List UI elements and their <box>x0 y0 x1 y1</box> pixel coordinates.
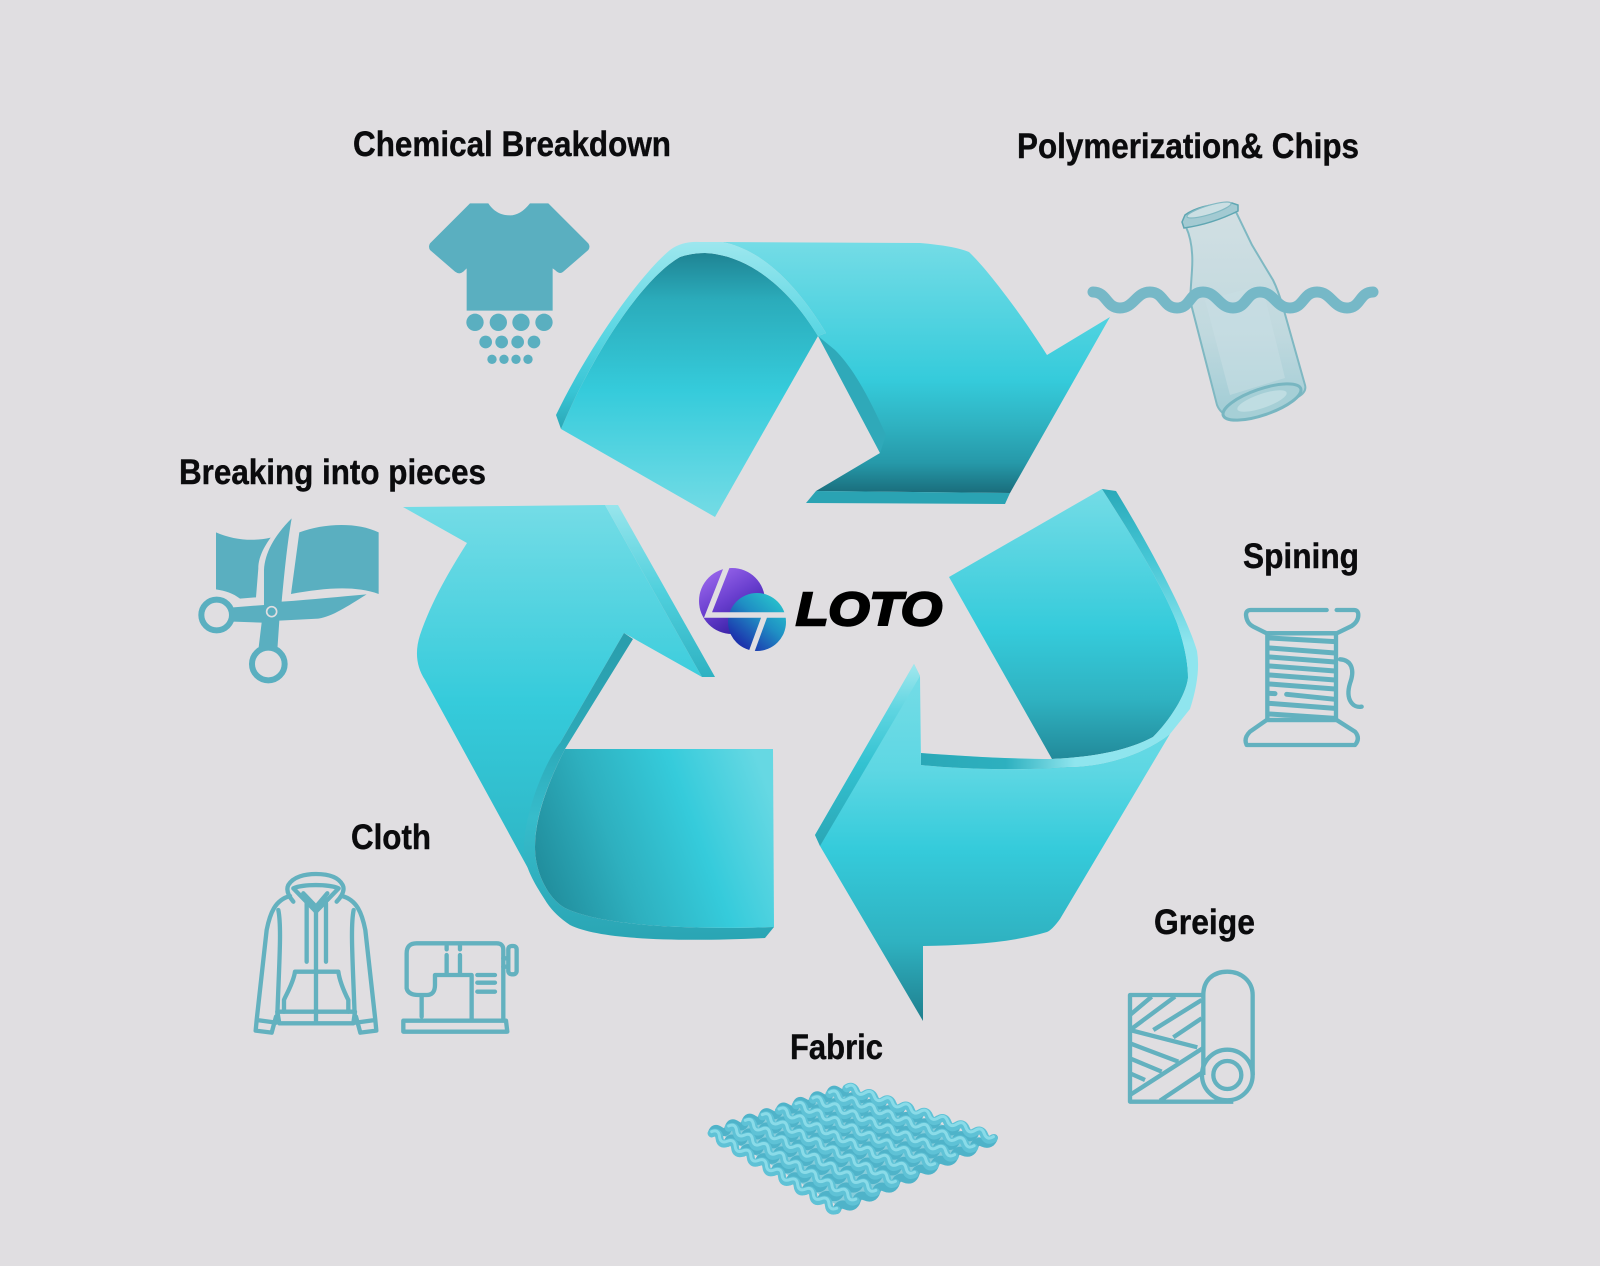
left arrow front panel <box>535 749 774 928</box>
right arrow rim <box>921 489 1198 769</box>
label: Cloth: Cloth <box>351 818 431 857</box>
machine wheel <box>508 946 517 974</box>
scissor pivot <box>267 607 277 617</box>
right arrow left edge <box>815 664 920 846</box>
roll end <box>1202 1050 1253 1100</box>
icon: greige fabric roll <box>1130 972 1253 1102</box>
zipper and drawstrings <box>307 903 326 1023</box>
top arrow rim <box>556 242 826 429</box>
thread wraps <box>1269 638 1335 718</box>
arrow: top recycling arrow <box>556 242 1110 517</box>
bottle base inner <box>1235 386 1289 416</box>
hem <box>277 1012 355 1023</box>
top arrow bottom strip <box>806 491 1010 504</box>
cloth piece right <box>291 525 379 594</box>
bottle body <box>1186 212 1305 418</box>
logo purple disc <box>699 568 765 634</box>
label: Chemical Breakdown: Chemical Breakdown <box>353 125 671 164</box>
bottle highlight <box>1205 285 1285 395</box>
roll core <box>1213 1061 1241 1089</box>
label: Polymerization & Chips: Polymerization& Chips <box>1017 127 1359 166</box>
strand highlights <box>710 1084 994 1211</box>
icon: bottle and water wave <box>1093 199 1373 428</box>
left sleeve <box>256 896 290 1033</box>
right arrow lower body <box>815 664 1170 1021</box>
machine panel lines <box>477 975 495 992</box>
right sleeve <box>342 896 376 1033</box>
spool top flange <box>1246 610 1358 633</box>
label: Fabric: Fabric <box>790 1028 883 1067</box>
left arrow body <box>403 505 702 903</box>
icon: scissors cutting cloth <box>201 518 379 680</box>
label: Breaking into pieces: Breaking into pieces <box>179 453 486 492</box>
logo wordmark: LOTO <box>796 583 942 635</box>
hood <box>287 874 344 912</box>
weave stripes <box>1130 997 1203 1101</box>
top arrow main band <box>722 242 1110 493</box>
label: Greige: Greige <box>1154 903 1255 942</box>
arrow: left recycling arrow <box>403 505 774 940</box>
main strands <box>710 1085 994 1213</box>
scissor ring left <box>201 600 232 630</box>
right arrow rim shadow <box>921 753 1075 769</box>
thread tail <box>1340 659 1362 707</box>
machine wheel axle <box>503 958 508 967</box>
icon: woven fabric <box>710 1084 995 1213</box>
shirt <box>429 203 589 311</box>
machine base <box>403 1021 507 1032</box>
top arrow inner face <box>561 253 818 517</box>
icon: sewing machine <box>403 943 517 1032</box>
left arrow fold strip <box>524 633 774 940</box>
top arrow inner edge <box>818 336 886 453</box>
bottle rim <box>1182 203 1238 228</box>
logo: LOTO <box>699 564 942 656</box>
logo cut lines <box>708 564 790 656</box>
cross strands <box>711 1086 995 1213</box>
scissor ring bottom <box>252 648 285 680</box>
icon: thread spool <box>1246 610 1362 745</box>
label: Spining: Spining <box>1243 537 1359 576</box>
roll <box>1203 972 1253 1075</box>
bottle base <box>1219 376 1305 428</box>
fabric base <box>720 1093 983 1205</box>
machine head <box>407 943 503 1020</box>
pocket <box>284 972 348 1012</box>
left arrow head rim <box>605 505 715 677</box>
dots <box>466 314 553 364</box>
spool body <box>1267 633 1336 720</box>
logo blue disc <box>728 593 786 651</box>
arrow: right recycling arrow <box>815 489 1198 1021</box>
cloth piece left <box>216 532 271 599</box>
spool bottom flange <box>1246 720 1358 745</box>
scissor blades <box>233 518 367 650</box>
water wave <box>1093 292 1373 308</box>
right arrow upper face <box>949 489 1188 759</box>
icon: hoodie <box>256 874 376 1033</box>
cloth sheet <box>1130 995 1233 1102</box>
icon: t-shirt dissolving into dots <box>429 203 589 364</box>
bottle neck opening <box>1186 199 1232 221</box>
